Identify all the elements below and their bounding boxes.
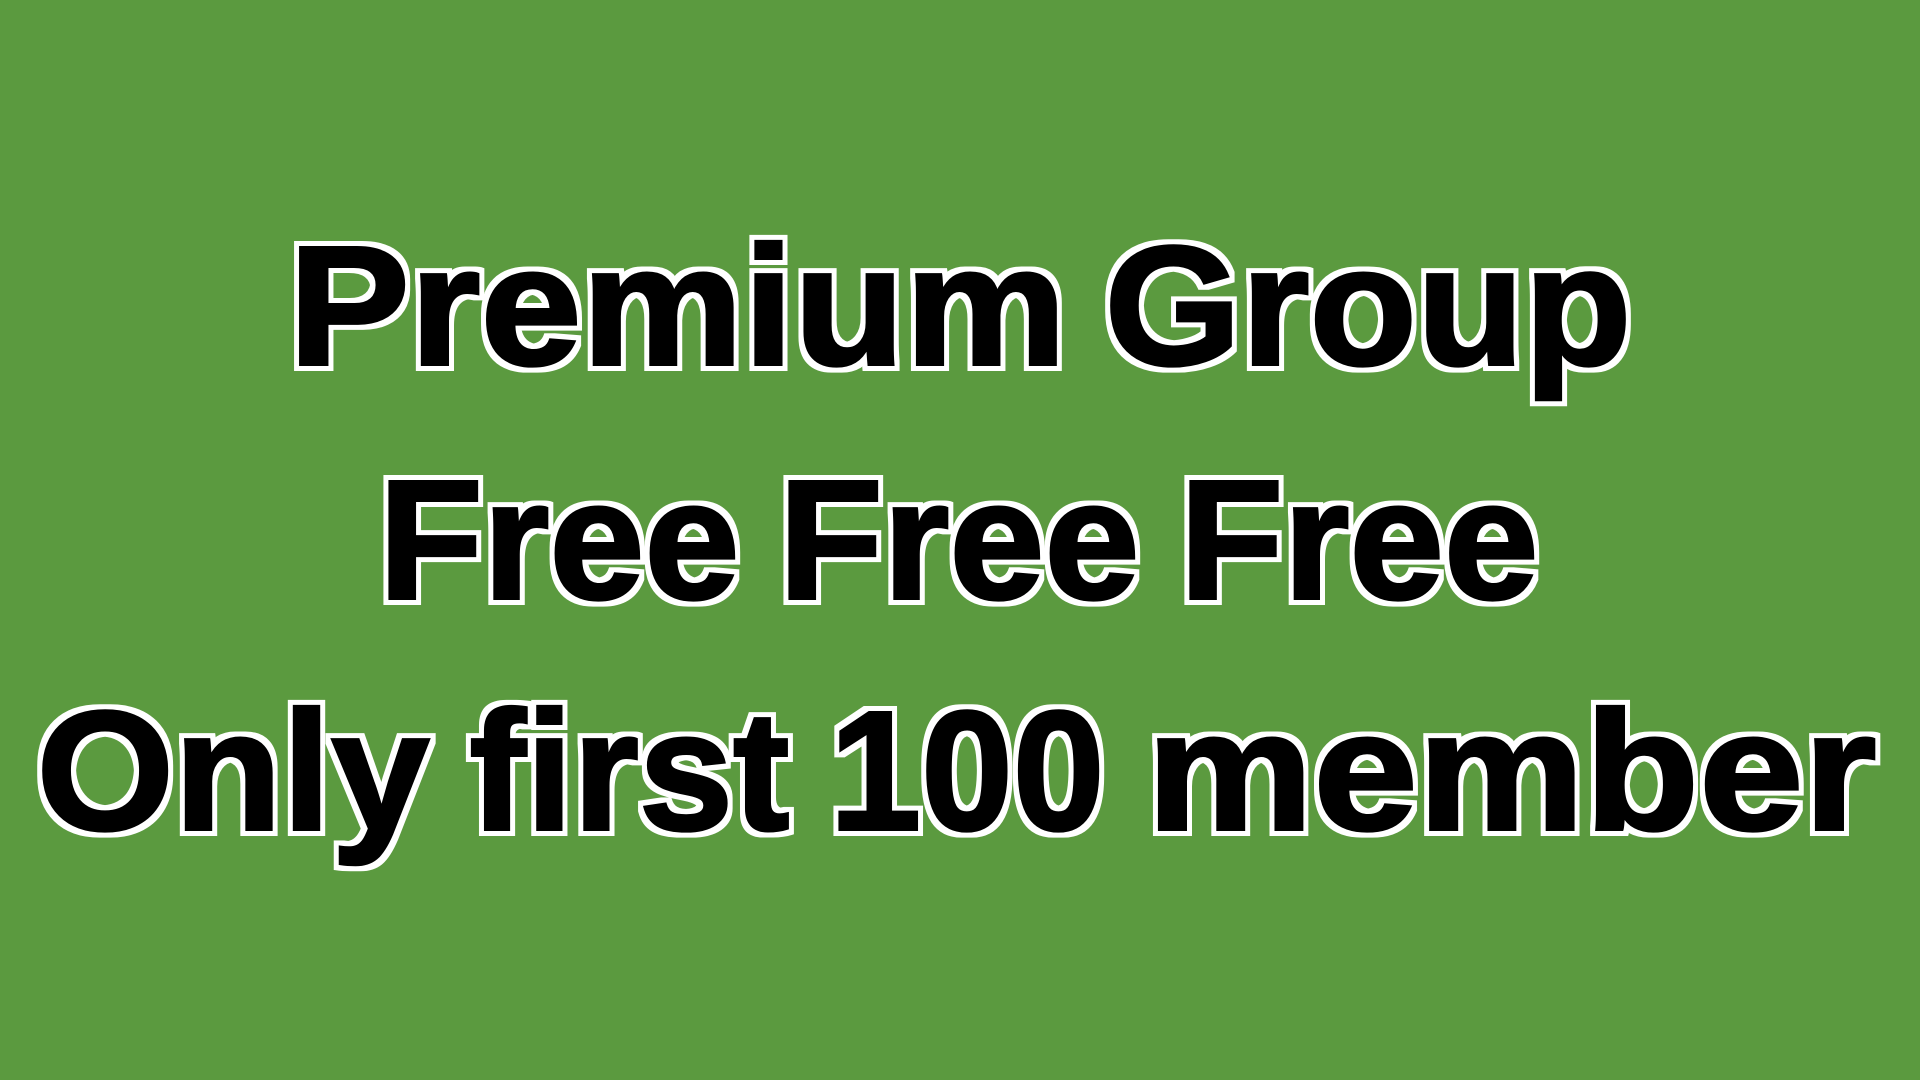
text: Only first 100 member: Only — [36, 676, 430, 866]
text: Free Free Free — [378, 446, 1538, 636]
heading: Premium Group: Premium — [288, 212, 1066, 402]
heading: Premium Group: Group — [1104, 212, 1632, 402]
text: Only first 100 member: member — [1146, 676, 1876, 866]
text: Only first 100 member: first — [470, 676, 790, 866]
text: Only first 100 member — [36, 676, 1876, 866]
text: Free Free Free: Free — [378, 446, 740, 636]
text: Free Free Free: Free — [1180, 446, 1538, 636]
text: Free Free Free: Free — [778, 446, 1140, 636]
text: Only first 100 member: 100 — [830, 676, 1104, 866]
heading: Premium Group — [288, 212, 1632, 402]
